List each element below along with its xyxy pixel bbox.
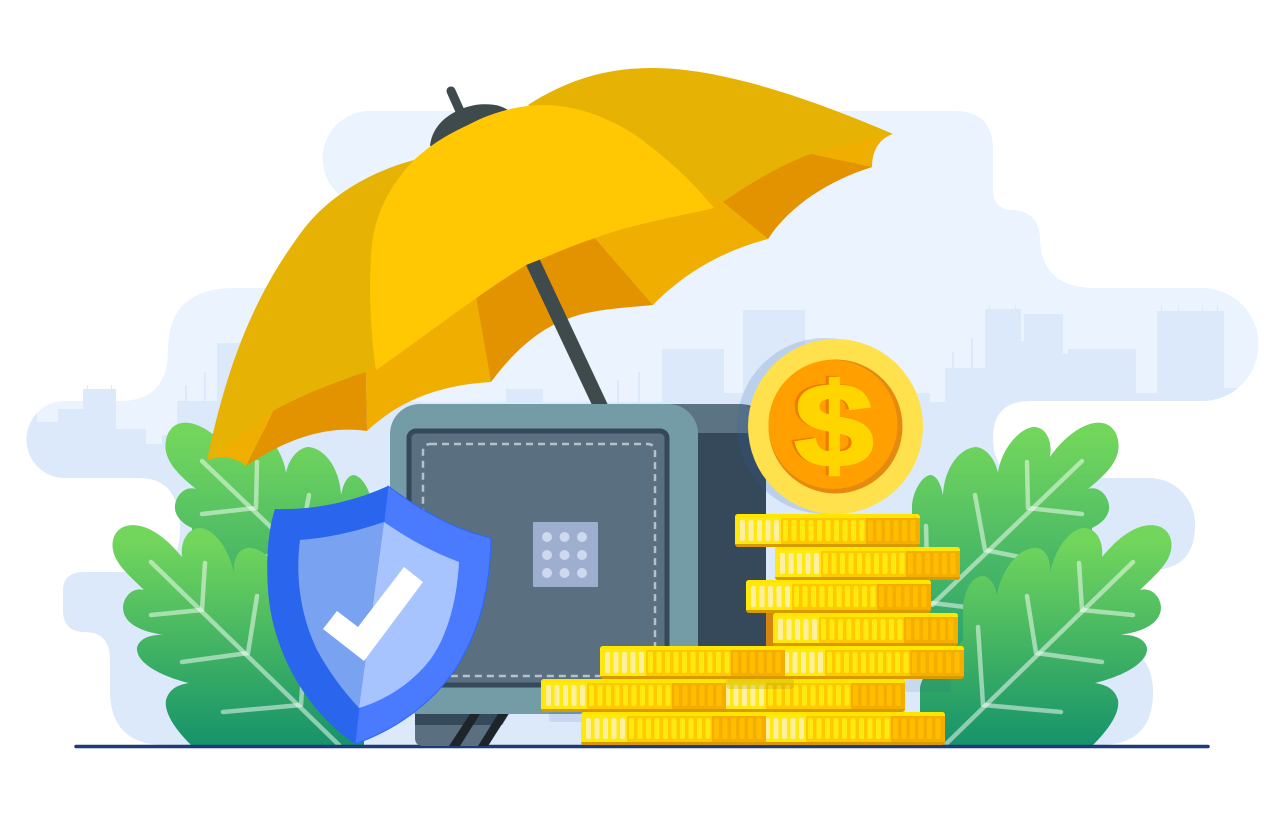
row 1 coin	[735, 514, 920, 547]
left back leaf	[165, 423, 372, 650]
city skyline	[26, 305, 1238, 744]
door dashed outline	[423, 444, 655, 676]
coin stack	[541, 514, 964, 745]
inner right	[359, 522, 459, 708]
inner left	[298, 522, 384, 708]
row 7 right coin	[760, 712, 945, 745]
row 7 left coin	[581, 712, 766, 745]
back left panel	[207, 160, 414, 462]
right front leaf	[920, 525, 1172, 745]
right rim sliver	[723, 136, 885, 202]
shield right half	[355, 486, 491, 744]
row 6 right coin	[720, 679, 905, 712]
umbrella top knob	[430, 91, 510, 150]
illustration canvas	[26, 68, 1258, 748]
safe front	[390, 404, 698, 714]
umbrella pole	[526, 258, 608, 405]
umbrella front panel	[370, 105, 714, 370]
umbrella left tip overlap is above safe: coin shadow on safe	[737, 338, 913, 514]
row 6 left coin	[541, 679, 726, 712]
safe legs	[415, 712, 510, 746]
safe door	[409, 431, 667, 685]
middle left panel	[366, 290, 491, 431]
middle dark lobe	[475, 220, 653, 382]
shield with check	[267, 486, 491, 744]
orange backing	[766, 613, 786, 647]
row 4 coin	[773, 613, 958, 646]
safe	[390, 404, 766, 746]
shield left half	[267, 486, 388, 744]
right back leaf	[912, 423, 1119, 650]
large dollar coin	[748, 339, 923, 514]
row 5 right coin	[779, 646, 964, 679]
right dark lobe	[723, 154, 872, 239]
row 2 coin	[775, 547, 960, 580]
umbrella under panels	[207, 68, 893, 466]
right under panel	[595, 190, 768, 305]
coin shadow on right leaf	[905, 679, 951, 692]
ground line	[76, 745, 1208, 748]
left dark lobe	[246, 372, 367, 466]
left front leaf	[112, 525, 364, 745]
dollar sign: $	[795, 359, 873, 491]
coin shadow on safe leg	[549, 712, 583, 722]
row 3 coin	[746, 580, 931, 613]
row 5 left coin	[600, 646, 785, 679]
back right panel	[528, 68, 893, 239]
shadow under coin	[726, 679, 794, 689]
check mark	[323, 567, 423, 661]
background cloud blob	[26, 111, 1258, 745]
left gold sliver	[207, 411, 273, 466]
dollar sign: $	[792, 358, 870, 490]
keypad	[533, 522, 598, 587]
safe side	[660, 404, 766, 650]
